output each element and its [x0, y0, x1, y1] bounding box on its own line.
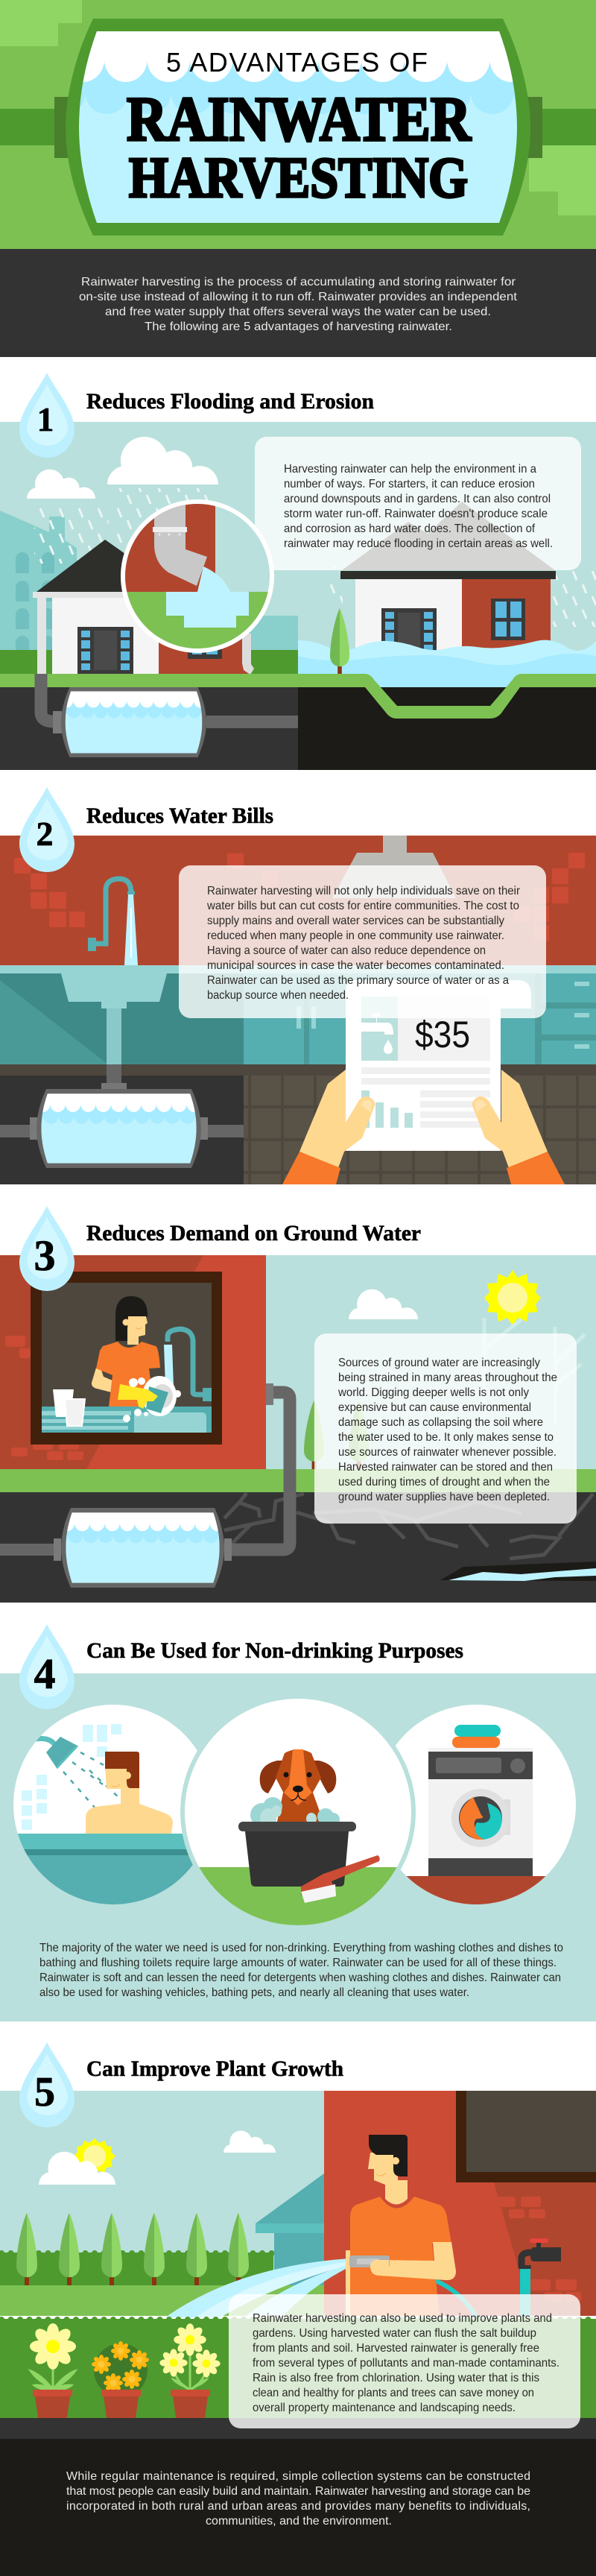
- icon: yellow flower pot: [30, 2323, 76, 2418]
- intro band: on-site use instead of allowing it to run off. Rainwater provides an independent: [79, 291, 518, 303]
- icon: woman washing dishes: [92, 1296, 212, 1407]
- text: water bills: backup source when needed.: [207, 989, 349, 1002]
- text: flooding: around downspouts and in gardens. It can also control: [284, 493, 551, 505]
- icon: bucket: [238, 1822, 356, 1887]
- icon: drop number 1: 1: [37, 401, 54, 438]
- panel: non-drinking uses: [0, 1673, 596, 2021]
- icon: water spray: [165, 2258, 352, 2317]
- footer: communities, and the environment.: [206, 2515, 392, 2528]
- icon: drop number 2: [19, 787, 74, 872]
- circle: laundry: [395, 1705, 576, 1904]
- text: flooding: rainwater may reduce flooding in certain areas as well.: [284, 537, 553, 550]
- text: water bills: supply mains and overall water services can be substantially: [207, 915, 504, 927]
- text: ground water: world. Digging deeper wells is not only: [337, 1386, 529, 1399]
- text panel background: [179, 865, 546, 1018]
- text: non-drinking: Rainwater is soft and can lessen the need for detergents when washing clothes and dishes. Rainwater can: [39, 1972, 561, 1984]
- icon: drop number 3: 3: [34, 1231, 55, 1280]
- ground: [0, 674, 596, 719]
- text: ground water: Sources of ground water are increasingly: [338, 1357, 540, 1369]
- text: ground water: being strained in many areas throughout the: [338, 1371, 557, 1384]
- lawn mound under the panel: [282, 2285, 324, 2316]
- text: water bills: municipal sources in case the water becomes contaminated.: [207, 959, 504, 972]
- icon: kitchen window frame: [31, 1272, 222, 1445]
- icon: left house: [33, 531, 254, 675]
- title: 5 ADVANTAGES OF: [166, 47, 428, 78]
- text: ground water: use sources of rainwater whenever possible.: [338, 1446, 557, 1459]
- title: HARVESTING: [129, 145, 468, 209]
- text: plant growth: clean and healthy for plants and trees can save money on: [253, 2387, 534, 2399]
- icon: range hood: [332, 836, 456, 898]
- background building: [0, 511, 298, 651]
- text panel background: [314, 1333, 577, 1524]
- heading: section 3: Reduces Demand on Ground Water: [86, 1221, 421, 1246]
- text: ground water: ground water supplies have been depleted.: [338, 1491, 550, 1503]
- footer: incorporated in both rural and urban areas and provides many benefits to individuals,: [66, 2500, 530, 2513]
- back hedge: [0, 2253, 273, 2285]
- title: [127, 47, 472, 209]
- text: water bills: [206, 885, 521, 1002]
- icon: outdoor tap: [519, 2238, 561, 2316]
- icon: sink: [61, 973, 167, 1083]
- icon: brush: [301, 1855, 380, 1903]
- text: water bills: Rainwater harvesting will not only help individuals save on their: [207, 885, 521, 897]
- icon: clouds and rain: [27, 437, 596, 627]
- icon: right house: [340, 502, 556, 654]
- text: plant growth: Rainwater harvesting can also be used to improve plants and: [253, 2312, 552, 2325]
- icon: sun: [74, 2138, 115, 2174]
- icon: sink and glasses: [42, 1389, 212, 1433]
- header panel: [0, 0, 596, 249]
- intro band: Rainwater harvesting is the process of accumulating and storing rainwater for: [81, 276, 516, 288]
- icon: trees: [304, 1401, 369, 1469]
- text: plant growth: from plants and soil. Harvested rainwater is generally free: [253, 2342, 539, 2355]
- intro band: and free water supply that offers several ways the water can be used.: [105, 306, 491, 318]
- front hedge: [0, 2319, 596, 2418]
- text: flooding: [284, 463, 553, 550]
- icon: shed: [256, 2174, 324, 2285]
- text: non-drinking: The majority of the water we need is used for non-drinking. Everything from washing clothes and dishes to: [39, 1942, 563, 1954]
- footer: While regular maintenance is required, simple collection systems can be constructed: [66, 2470, 530, 2483]
- flood water: [298, 640, 596, 706]
- icon: drop number 2: 2: [36, 815, 54, 853]
- icon: title water tank: [42, 19, 557, 236]
- text: water bills: reduced when many people in one community use rainwater.: [207, 929, 504, 942]
- text: plant growth: overall property maintenance and landscaping needs.: [253, 2402, 516, 2414]
- text: non-drinking: bathing and flushing toilets require large amounts of water. Rainwater can be used for all of these things.: [39, 1957, 557, 1969]
- pipes and storage tank: [41, 674, 298, 757]
- pipes and storage tank: [0, 1383, 290, 1588]
- text panel background: [229, 2294, 580, 2428]
- footer: that most people can easily build and maintain. Rainwater harvesting and storage can be: [66, 2485, 530, 2498]
- intro band: [0, 249, 596, 357]
- text: water bills: Rainwater can be used as the primary source of water or as a: [207, 974, 509, 987]
- icon: dry water seam: [440, 1562, 596, 1581]
- text: plant growth: Rain is also free from chlorination. Using water that is this: [253, 2372, 539, 2384]
- house wall and window: [324, 2091, 596, 2316]
- text: flooding: Harvesting rainwater can help the environment in a: [284, 463, 536, 476]
- text: water bills: water bills but can cut costs for entire communities. The cost to: [206, 900, 519, 912]
- text: ground water: [337, 1357, 557, 1503]
- text: plant growth: from several types of pollutants and man-made contaminants.: [253, 2357, 559, 2370]
- panel: water bills illustration: [0, 836, 596, 1184]
- icon: drop number 4: [19, 1624, 74, 1709]
- icon: row of trees: [16, 2213, 249, 2285]
- icon: plate, sponge, glove: [118, 1376, 181, 1422]
- heading: section 2: Reduces Water Bills: [86, 804, 273, 828]
- icon: dead tree: [454, 1318, 585, 1424]
- text: plant growth: gardens. Using harvested water can flush the salt buildup: [253, 2327, 536, 2340]
- icon: drop number 4: 4: [34, 1650, 55, 1698]
- text: non-drinking: [39, 1942, 563, 1999]
- intro band: The following are 5 advantages of harvesting rainwater.: [145, 321, 452, 333]
- heading: section 5: Can Improve Plant Growth: [86, 2056, 343, 2081]
- icon: sun: [484, 1270, 541, 1325]
- text: water bills: Having a source of water can also reduce dependence on: [207, 944, 486, 957]
- icon: right hand: [472, 1070, 565, 1184]
- icon: drop number 5: 5: [34, 2069, 55, 2115]
- text: plant growth: [253, 2312, 559, 2414]
- icon: dog: [260, 1749, 336, 1822]
- panel: plant growth illustration: [0, 2091, 596, 2439]
- text: ground water: damage such as collapsing the soil where: [338, 1416, 543, 1429]
- icon: water bill: $35: [415, 1014, 470, 1055]
- icon: magnifier on downspout: [119, 499, 276, 659]
- text: ground water: Harvested rainwater can be stored and then: [338, 1461, 553, 1474]
- cabinets: [297, 973, 596, 1064]
- icon: tree: [330, 608, 349, 674]
- pipes and storage tank: [0, 1083, 244, 1168]
- icon: hose: [436, 2281, 477, 2318]
- panel: flooding illustration: [0, 422, 596, 770]
- bricks: [5, 1336, 83, 1460]
- icon: orange flower pot: [92, 2341, 149, 2418]
- circle: dog wash: [179, 1694, 417, 1934]
- cracks in soil: [224, 1493, 593, 1559]
- icon: man with hose: [346, 2135, 456, 2316]
- circle: shower: [13, 1705, 197, 1904]
- icon: water bill: [346, 980, 531, 1151]
- heading: section 1: Reduces Flooding and Erosion: [86, 389, 374, 414]
- icon: drop number 3: [19, 1206, 74, 1291]
- footer: [0, 2439, 596, 2576]
- icon: left hand: [282, 1070, 375, 1184]
- text: ground water: expensive but can cause environmental: [338, 1401, 531, 1414]
- text: flooding: and corrosion as hard water does. The collection of: [284, 523, 536, 535]
- panel: ground water illustration: [0, 1255, 596, 1603]
- bricks: [14, 853, 585, 941]
- icon: triple flower pot: [159, 2323, 221, 2418]
- text: flooding: storm water run-off. Rainwater doesn't produce scale: [284, 508, 548, 520]
- text: non-drinking: also be used for washing vehicles, bathing pets, and nearly all cleaning that uses water.: [39, 1986, 469, 1999]
- text: ground water: used during times of drought and when the: [338, 1476, 550, 1489]
- text: flooding: number of ways. For starters, it can reduce erosion: [284, 478, 535, 490]
- icon: drop number 1: [19, 373, 74, 458]
- icon: drop number 5: [19, 2042, 74, 2127]
- heading: section 4: Can Be Used for Non-drinking Purposes: [86, 1638, 463, 1663]
- text panel background: [255, 437, 581, 570]
- text: ground water: the water used to be. It only makes sense to: [338, 1431, 554, 1444]
- icon: bubbles: [250, 1797, 340, 1829]
- title: RAINWATER: [127, 84, 472, 154]
- icon: clouds: [39, 2130, 276, 2185]
- icon: faucet: [88, 879, 138, 965]
- icon: cloud: [349, 1289, 418, 1319]
